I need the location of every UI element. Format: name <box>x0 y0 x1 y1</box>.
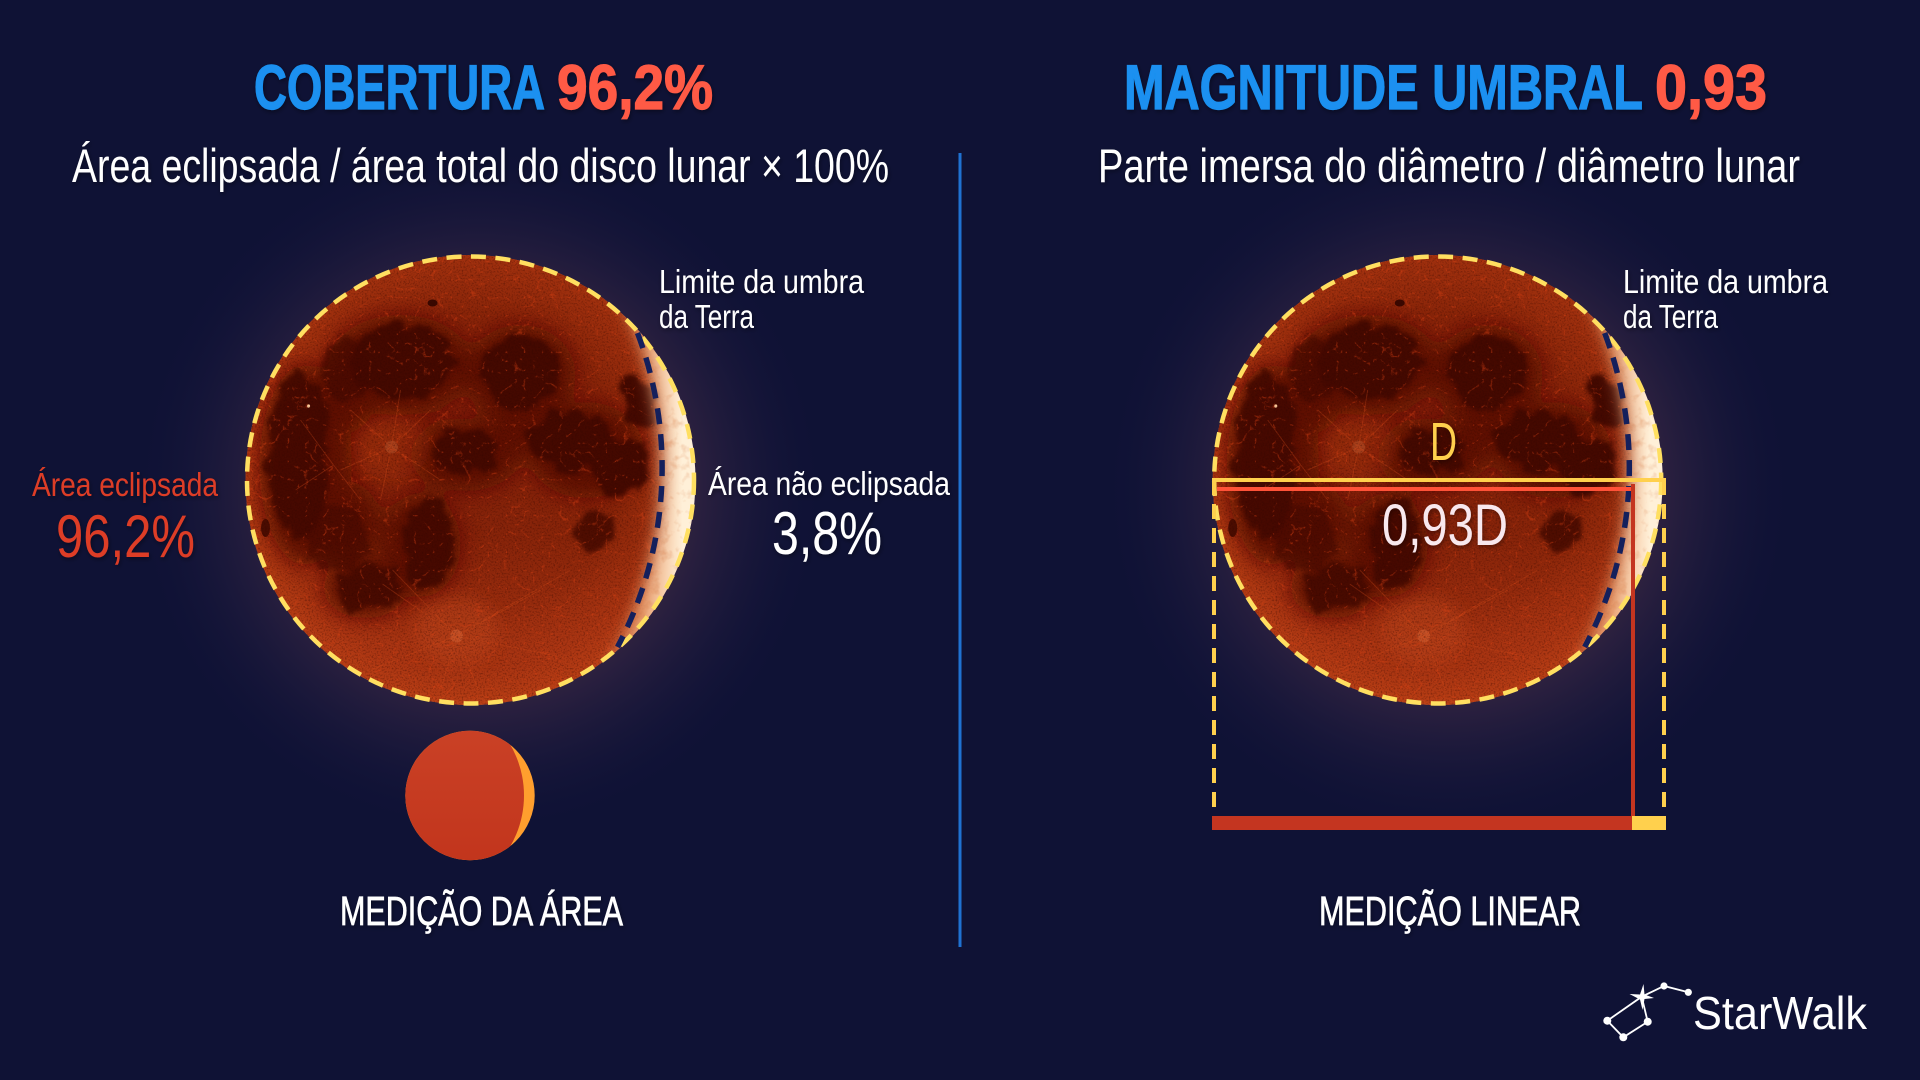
logo: StarWalk <box>1603 982 1868 1041</box>
label: umbra limit: Limite da umbra <box>659 263 865 300</box>
icon: area measurement disc <box>405 730 535 860</box>
moon with umbra limit <box>1208 250 1668 710</box>
caption: linear measurement: MEDIÇÃO LINEAR <box>1319 888 1581 934</box>
divider <box>958 153 962 947</box>
label: diameter D: D <box>1430 412 1457 472</box>
label: umbra limit: Limite da umbra <box>1623 263 1829 300</box>
label: umbra limit <box>659 263 865 335</box>
left dashed guide <box>1212 480 1216 812</box>
bar: uneclipsed part <box>1632 816 1666 830</box>
heading: coverage: 96,2% <box>557 53 713 123</box>
right dashed guide <box>1662 480 1666 812</box>
panel: umbral magnitude <box>1098 53 1829 934</box>
panel: coverage <box>32 53 951 934</box>
heading: umbral magnitude: 0,93 <box>1655 53 1767 123</box>
label: umbra limit: da Terra <box>659 298 755 335</box>
label: eclipsed area <box>32 466 219 570</box>
label: uneclipsed area: 3,8% <box>772 500 882 567</box>
left moon glow <box>140 150 820 830</box>
label: uneclipsed area <box>708 465 951 567</box>
immersed guide line <box>1631 484 1635 818</box>
label: 0,93D: 0,93D <box>1382 493 1508 558</box>
heading: coverage: COBERTURA <box>254 53 545 123</box>
label: eclipsed area: 96,2% <box>56 503 195 570</box>
line: full diameter <box>1212 478 1666 482</box>
label: uneclipsed area: Área não eclipsada <box>708 465 951 502</box>
label: umbra limit <box>1623 263 1829 335</box>
icon: constellation <box>1603 982 1692 1041</box>
wordmark: StarWalk <box>1693 987 1868 1039</box>
label: umbra limit: da Terra <box>1623 298 1719 335</box>
moon with area outline <box>240 250 700 710</box>
label: eclipsed area: Área eclipsada <box>32 466 219 503</box>
heading: umbral magnitude: MAGNITUDE UMBRAL <box>1124 53 1643 123</box>
bar: immersed part <box>1212 816 1632 830</box>
line: immersed diameter <box>1217 487 1633 491</box>
measurement diagram <box>1212 478 1666 830</box>
right moon glow <box>1108 150 1788 830</box>
caption: area measurement: MEDIÇÃO DA ÁREA <box>340 888 623 934</box>
formula: coverage: Área eclipsada / área total do disco lunar × 100% <box>72 139 889 192</box>
